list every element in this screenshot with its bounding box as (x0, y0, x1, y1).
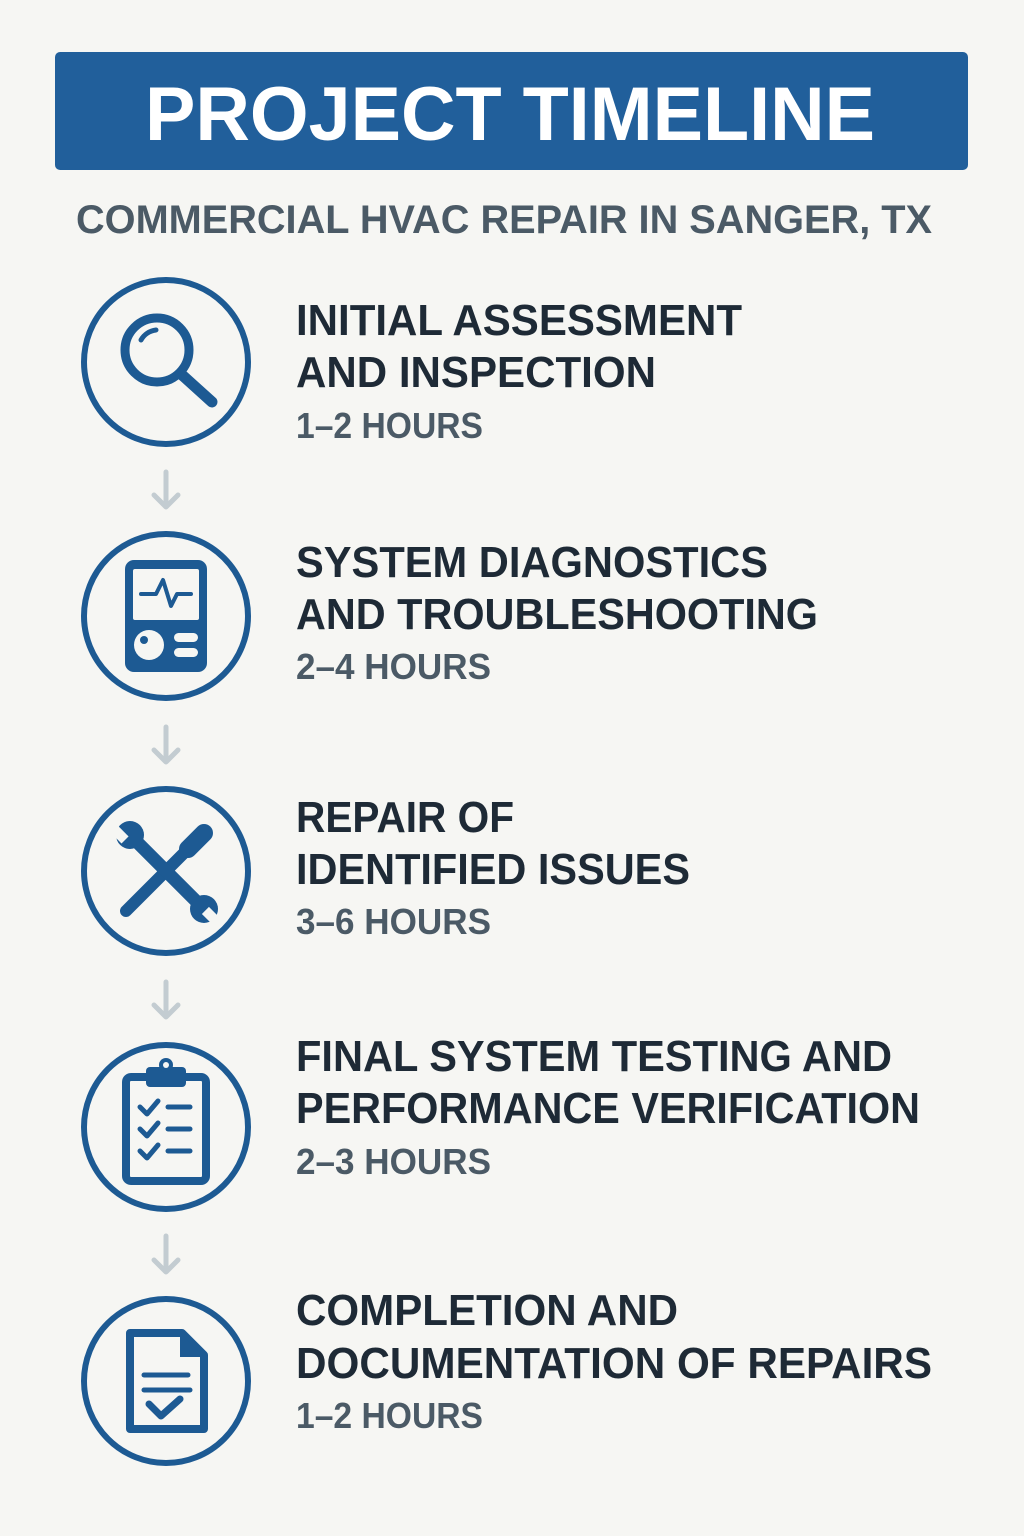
step 1 text (296, 296, 742, 446)
step 2 text: SYSTEM DIAGNOSTICS (296, 538, 768, 587)
step 2 text: AND TROUBLESHOOTING (296, 590, 818, 639)
icon: clipboard checklist (84, 1045, 248, 1209)
icon: document with check (84, 1299, 248, 1463)
step 4 text: 2–3 HOURS (296, 1141, 491, 1182)
step 1 (84, 280, 742, 446)
step 4 text: PERFORMANCE VERIFICATION (296, 1084, 920, 1133)
step 5 text: 1–2 HOURS (296, 1395, 483, 1436)
step 4 text: FINAL SYSTEM TESTING AND (296, 1032, 892, 1081)
step 4 text (296, 1032, 920, 1182)
icon: diagnostic device (84, 534, 248, 698)
icon: magnifying glass (84, 280, 248, 444)
step 3 text: REPAIR OF (296, 793, 514, 842)
subtitle: COMMERCIAL HVAC REPAIR IN SANGER, TX (76, 198, 932, 242)
arrow 4 (154, 1236, 178, 1272)
step 5 (84, 1286, 932, 1463)
step 2 text (296, 538, 818, 687)
step 2 text: 2–4 HOURS (296, 646, 491, 687)
icon: wrench and screwdriver (84, 789, 248, 953)
title: PROJECT TIMELINE (145, 72, 875, 157)
step 3 text: IDENTIFIED ISSUES (296, 845, 690, 894)
step 5 text (296, 1286, 932, 1436)
step 4 (84, 1032, 920, 1209)
header banner (55, 52, 968, 170)
arrow 1 (154, 472, 178, 507)
step 3 (84, 789, 690, 953)
arrow 3 (154, 982, 178, 1017)
step 5 text: DOCUMENTATION OF REPAIRS (296, 1339, 932, 1388)
arrow 2 (154, 727, 178, 762)
step 3 text: 3–6 HOURS (296, 901, 491, 942)
step 1 text: INITIAL ASSESSMENT (296, 296, 742, 345)
step 5 text: COMPLETION AND (296, 1286, 678, 1335)
step 3 text (296, 793, 690, 942)
step 1 text: AND INSPECTION (296, 348, 656, 397)
step 2 (84, 534, 818, 698)
step 1 text: 1–2 HOURS (296, 405, 483, 446)
